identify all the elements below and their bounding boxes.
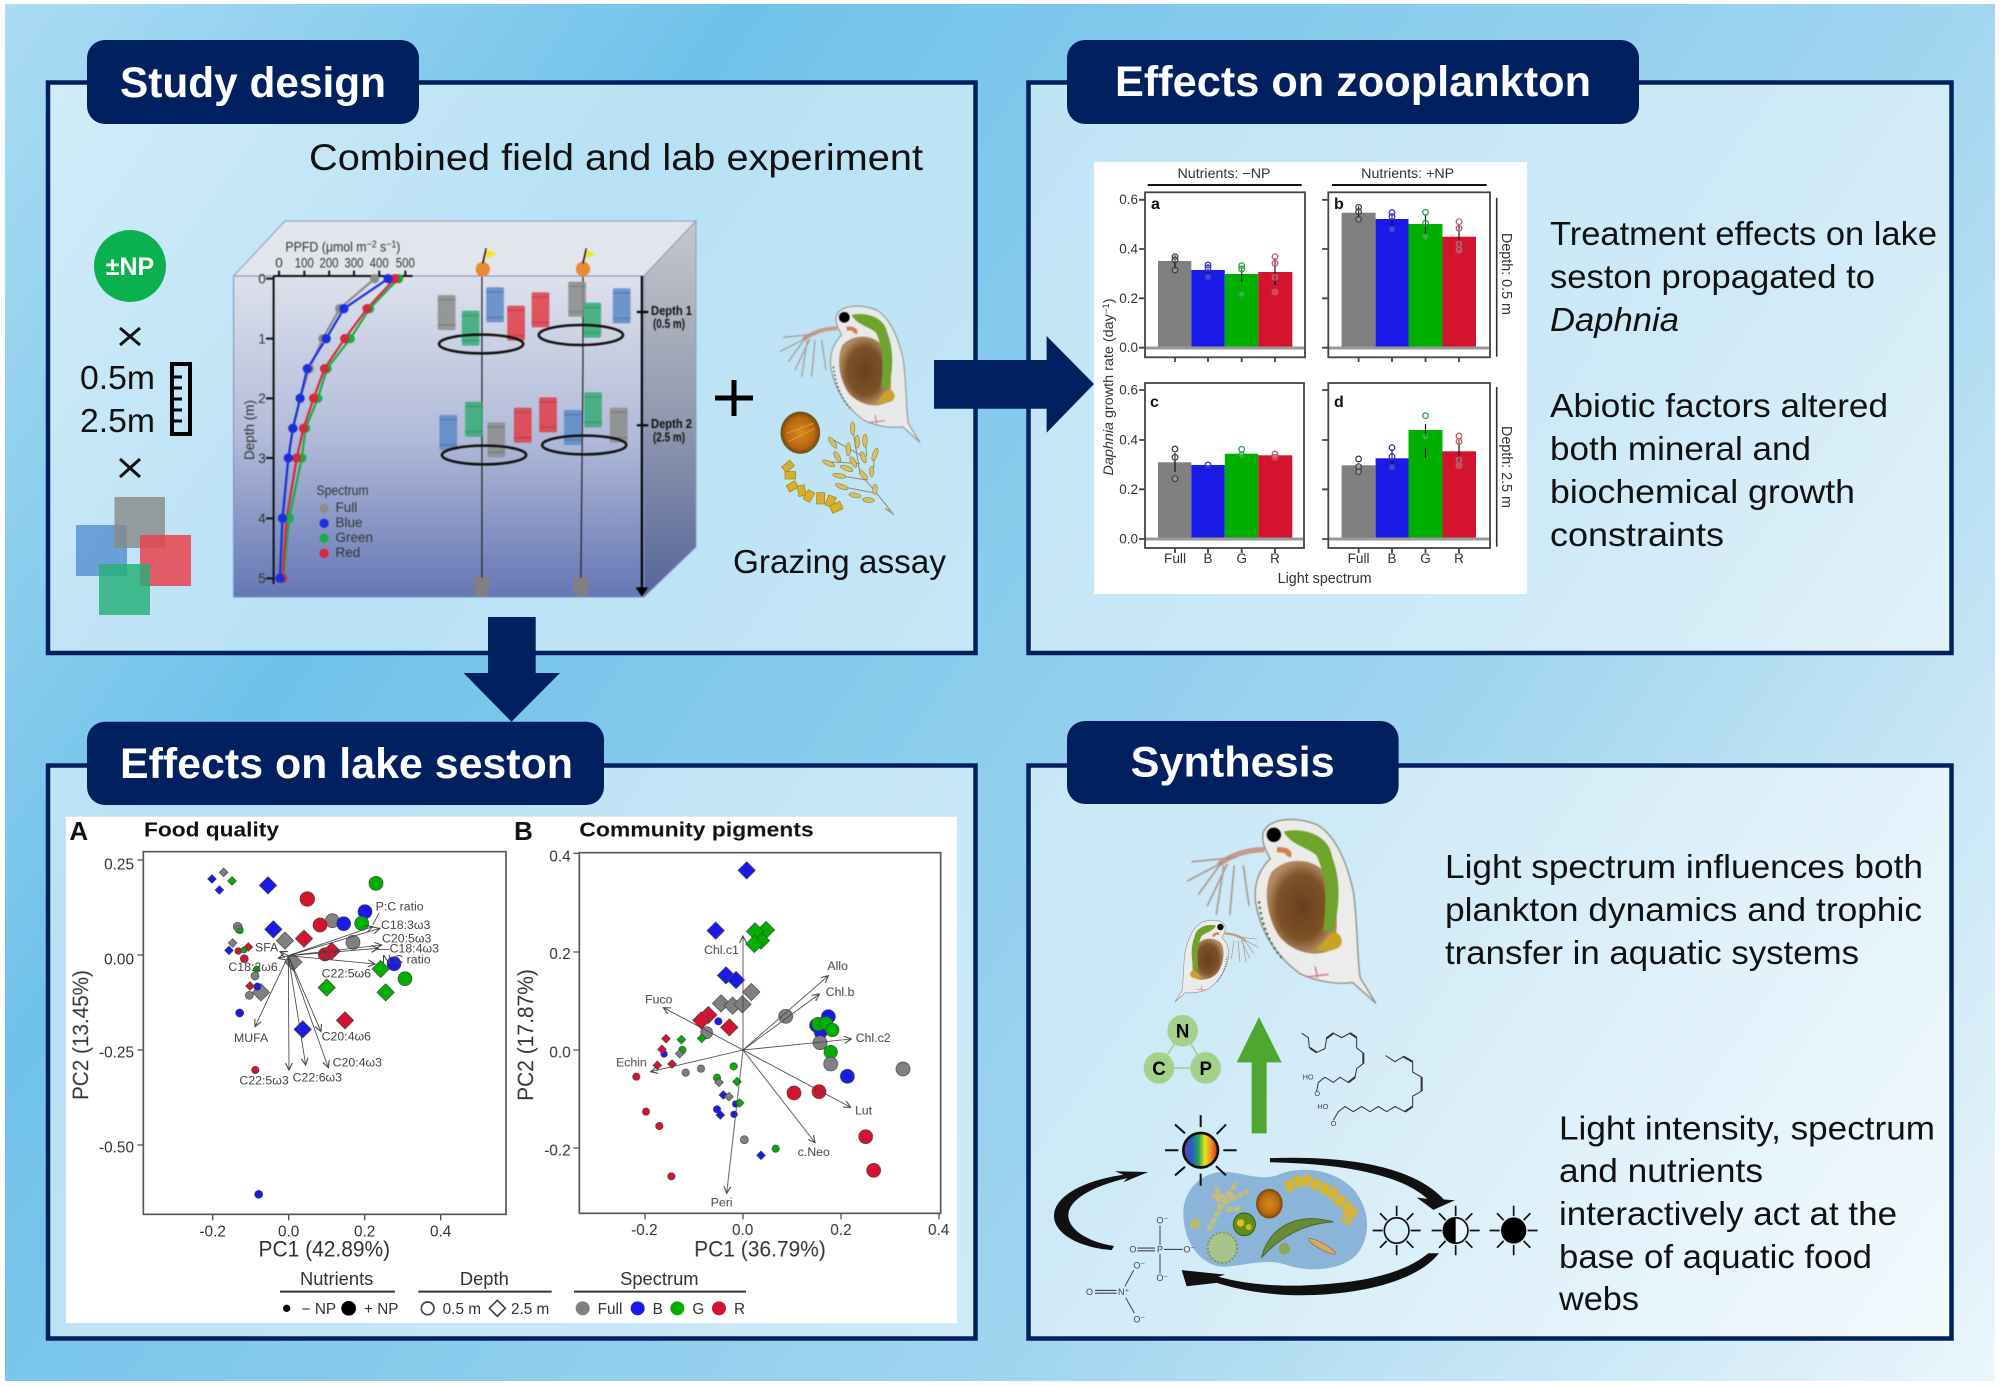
heading: synthesis bbox=[1067, 721, 1399, 804]
chart: food quality PCA bbox=[68, 816, 506, 1262]
chart: daphnia growth rate bars: a bbox=[1151, 196, 1160, 213]
labels: PCA loadings: C18:3ω3 bbox=[381, 918, 431, 932]
chart: PPFD light profile: 2 bbox=[258, 391, 266, 406]
label: depth markers: Depth 1 bbox=[651, 303, 692, 318]
text: light intensity and nutrients: and nutrients bbox=[1559, 1152, 1763, 1189]
blob: phytoplankton community bbox=[1183, 1170, 1367, 1269]
legend: nutrients depth spectrum: − NP bbox=[302, 1301, 336, 1318]
labels: PCA loadings: C20:5ω3 bbox=[382, 931, 432, 945]
labels: PCA loadings: C22:6ω3 bbox=[293, 1071, 342, 1085]
labels: PCA loadings: C22:5ω3 bbox=[239, 1073, 289, 1087]
arrows: pigment loadings bbox=[651, 936, 851, 1193]
labels: pigment loadings: Lut bbox=[855, 1103, 873, 1117]
chart: PPFD light profile: 3 bbox=[258, 451, 266, 466]
legend: nutrients depth spectrum: 0.5 m bbox=[443, 1301, 481, 1318]
chart: daphnia growth rate bars: 0.2 bbox=[1119, 482, 1138, 497]
labels: pigment loadings: Chl.b bbox=[826, 985, 855, 999]
chart: community pigments PCA: Community pigments bbox=[579, 819, 814, 842]
chart: food quality PCA: A bbox=[69, 816, 88, 846]
arrow: study design to seston bbox=[464, 617, 560, 722]
caption: grazing assay: Grazing assay bbox=[733, 543, 946, 580]
labels: pigment loadings: Chl.c2 bbox=[856, 1031, 891, 1045]
text: light spectrum influence: plankton dynamics and trophic bbox=[1445, 891, 1922, 928]
chart: PPFD light profile: 4 bbox=[258, 511, 266, 526]
depth labels bbox=[80, 359, 155, 439]
chart: PPFD light profile: 5 bbox=[258, 571, 266, 586]
points: pigment samples bbox=[633, 862, 910, 1180]
chart: food quality PCA: -0.25 bbox=[99, 1045, 134, 1062]
arrow: cycle left bbox=[1054, 1171, 1148, 1250]
bars: panel c bbox=[1158, 454, 1292, 539]
chart: food quality PCA: 0.0 bbox=[278, 1224, 299, 1241]
heading: effects on lake seston: Effects on lake seston bbox=[120, 740, 573, 788]
text: treatment effects: Treatment effects on lake bbox=[1550, 215, 1937, 252]
chart: food quality PCA: Food quality bbox=[144, 819, 280, 842]
heading: study design bbox=[87, 40, 419, 124]
chart: daphnia growth rate bars: d bbox=[1334, 394, 1344, 411]
chart: daphnia growth rate bars: −1 bbox=[1101, 303, 1111, 314]
label: depth markers: (0.5 m) bbox=[653, 316, 685, 331]
label: depth markers: (2.5 m) bbox=[653, 430, 685, 445]
chart: community pigments PCA: -0.2 bbox=[544, 1142, 571, 1159]
depth labels: 0.5m bbox=[80, 359, 155, 396]
text: abiotic factors: biochemical growth bbox=[1550, 473, 1855, 510]
legend: nutrients depth spectrum: Depth bbox=[460, 1268, 509, 1289]
labels: pigment loadings: c.Neo bbox=[798, 1145, 830, 1159]
icon: CNP stoichiometry: N bbox=[1176, 1021, 1189, 1043]
legend: spectrum: Spectrum bbox=[316, 483, 368, 498]
labels: PCA loadings: —C18:4ω3 bbox=[377, 942, 439, 956]
chart: PPFD light profile: Depth (m) bbox=[242, 400, 257, 460]
arrow: study design to zooplankton bbox=[934, 336, 1094, 433]
icon: CNP stoichiometry bbox=[1144, 1015, 1221, 1084]
chart: food quality PCA: PC1 (42.89%) bbox=[258, 1237, 390, 1262]
heading: effects on lake seston bbox=[87, 722, 604, 805]
arrow: cycle bottom bbox=[1182, 1253, 1439, 1295]
labels: PCA loadings: C20:4ω3 bbox=[333, 1056, 382, 1070]
legend: nutrients depth spectrum: G bbox=[692, 1301, 704, 1318]
text: light spectrum influence: transfer in aquatic systems bbox=[1445, 934, 1859, 971]
text: light spectrum influence bbox=[1445, 848, 1923, 971]
bars: panel d bbox=[1342, 430, 1476, 539]
icon: CNP stoichiometry: P bbox=[1199, 1059, 1212, 1080]
chart: PPFD light profile: 300 bbox=[344, 256, 364, 271]
chart: PPFD light profile: −2 bbox=[367, 240, 377, 251]
legend: nutrients depth spectrum: R bbox=[734, 1301, 745, 1318]
chart: daphnia growth rate bars: 0.4 bbox=[1119, 432, 1138, 448]
diagram: light nutrient food web cycle: O bbox=[1314, 1089, 1320, 1098]
chart: food quality PCA: 0.2 bbox=[354, 1224, 375, 1241]
text: abiotic factors: constraints bbox=[1550, 516, 1724, 553]
icon: phosphate and nitrate molecules: P bbox=[1157, 1244, 1163, 1255]
chart: daphnia growth rate bars: B bbox=[1387, 551, 1397, 566]
arrow: trophic transfer bbox=[1237, 1017, 1282, 1133]
text: abiotic factors bbox=[1550, 387, 1888, 553]
chart: PPFD light profile: 0 bbox=[258, 272, 266, 286]
icon: adult daphnia bbox=[1187, 820, 1376, 1004]
icon: depth ruler bbox=[172, 364, 190, 434]
chart: community pigments PCA: 0.2 bbox=[830, 1222, 852, 1239]
text: abiotic factors: Abiotic factors altered bbox=[1550, 387, 1888, 424]
chart: food quality PCA: -0.50 bbox=[99, 1140, 134, 1157]
heading: effects on zooplankton: Effects on zooplankton bbox=[1115, 58, 1591, 106]
diagram: incubation bottles on moorings bbox=[438, 248, 648, 597]
legend: spectrum: Red bbox=[336, 545, 360, 560]
panel: effects on lake seston bbox=[48, 722, 976, 1338]
chart: daphnia growth rate bars: ) bbox=[1101, 298, 1116, 303]
icon: phytoplankton food algae bbox=[781, 412, 894, 515]
icon: phosphate and nitrate molecules: N⁺ bbox=[1118, 1287, 1129, 1297]
labels: pigment loadings: Echin bbox=[616, 1056, 647, 1070]
chart: PPFD light profile: 500 bbox=[396, 256, 415, 271]
chart: community pigments PCA: B bbox=[514, 816, 533, 846]
chart: daphnia growth rate bars: Nutrients: +NP bbox=[1361, 166, 1454, 181]
chart: daphnia growth rate bars: 0.6 bbox=[1119, 382, 1138, 398]
chart: daphnia growth rate bars: Nutrients: −NP bbox=[1178, 166, 1270, 181]
labels: pigment loadings: Fuco bbox=[645, 992, 673, 1006]
chart: community pigments PCA bbox=[513, 816, 950, 1262]
icon: phosphate and nitrate molecules: O bbox=[1129, 1244, 1136, 1255]
legend: spectrum bbox=[316, 483, 373, 560]
legend: nutrients depth spectrum: 2.5 m bbox=[511, 1301, 549, 1318]
text: treatment effects: seston propagated to bbox=[1550, 258, 1875, 295]
icon: light intensity suns bbox=[1373, 1206, 1538, 1255]
icon: NP treatment badge: ±NP bbox=[106, 253, 154, 281]
chart: daphnia growth rate bars: 0.4 bbox=[1119, 242, 1138, 256]
legend: nutrients depth spectrum: Full bbox=[598, 1301, 622, 1318]
chart: community pigments PCA: 0.2 bbox=[549, 946, 571, 963]
labels: PCA loadings: C22:5ω6 bbox=[322, 967, 371, 981]
text: light intensity and nutrients: interactively act at the bbox=[1559, 1195, 1897, 1232]
icon: plus sign bbox=[715, 380, 753, 416]
labels: PCA loadings: C20:4ω6 bbox=[322, 1030, 371, 1044]
diagram: light nutrient food web cycle bbox=[1054, 1015, 1538, 1324]
chart: daphnia growth rate bars: Full bbox=[1348, 551, 1370, 566]
text: treatment effects: Daphnia bbox=[1550, 301, 1679, 338]
chart: PPFD light profile: 0 bbox=[275, 256, 283, 271]
chart: community pigments PCA: 0.4 bbox=[928, 1222, 950, 1239]
chart: daphnia growth rate bars: Light spectrum bbox=[1278, 571, 1372, 587]
chart: PPFD light profile: 100 bbox=[295, 256, 314, 271]
chart: daphnia growth rate bars: 0.2 bbox=[1119, 291, 1138, 306]
text: light intensity and nutrients bbox=[1558, 1110, 1935, 1317]
diagram: lake mesocosm block bbox=[234, 221, 696, 597]
chart: daphnia growth rate bars: Daphnia growth rate (day bbox=[1101, 321, 1116, 476]
icon: juvenile daphnia bbox=[1175, 920, 1259, 1002]
bars: panel b bbox=[1342, 213, 1476, 348]
icon: phosphate and nitrate molecules: O⁻ bbox=[1183, 1244, 1195, 1255]
labels: pigment loadings: Chl.c1 bbox=[704, 943, 739, 957]
chart: daphnia growth rate bars: B bbox=[1203, 551, 1213, 566]
icon: CNP stoichiometry: C bbox=[1152, 1059, 1166, 1080]
chart: food quality PCA: PC2 (13.45%) bbox=[68, 970, 93, 1100]
icon: multiply sign bbox=[120, 459, 140, 477]
chart: daphnia growth rate bars bbox=[1094, 162, 1527, 594]
chart: PPFD light profile: s bbox=[377, 239, 386, 255]
labels: PCA loadings: N:C ratio bbox=[382, 952, 431, 966]
chart: daphnia growth rate bars: G bbox=[1420, 551, 1431, 566]
icon: overlapping spectrum squares bbox=[76, 497, 191, 615]
diagram: light nutrient food web cycle: HO bbox=[1303, 1073, 1314, 1082]
icon: phosphate and nitrate molecules: O⁻ bbox=[1156, 1215, 1168, 1226]
text: light intensity and nutrients: base of aquatic food bbox=[1559, 1238, 1872, 1275]
panel: synthesis bbox=[1028, 721, 1952, 1338]
text: light intensity and nutrients: webs bbox=[1558, 1280, 1639, 1317]
legend: nutrients depth spectrum: + NP bbox=[364, 1301, 399, 1318]
points: seston samples bbox=[208, 868, 412, 1198]
heading: effects on zooplankton bbox=[1067, 40, 1639, 124]
chart: community pigments PCA: 0.0 bbox=[549, 1044, 571, 1061]
label: depth markers: Depth 2 bbox=[651, 416, 692, 431]
chart: daphnia growth rate bars: Depth: 2.5 m bbox=[1498, 426, 1515, 508]
chart: daphnia growth rate bars: Full bbox=[1164, 551, 1186, 566]
legend: spectrum: Blue bbox=[336, 515, 363, 530]
chart: PPFD light profile bbox=[242, 239, 415, 586]
chart: community pigments PCA: 0.4 bbox=[549, 849, 571, 866]
panel: effects on zooplankton bbox=[1028, 40, 1952, 653]
chart: daphnia growth rate bars: 0.6 bbox=[1119, 192, 1138, 207]
icon: rainbow sun bbox=[1165, 1115, 1237, 1186]
icon: phosphate and nitrate molecules: O⁻ bbox=[1133, 1314, 1145, 1324]
icon: daphnia bbox=[780, 306, 920, 442]
labels: PCA loadings: C18:2ω6 bbox=[228, 960, 278, 974]
icon: fatty acid molecules bbox=[1302, 1033, 1422, 1120]
legend: nutrients depth spectrum: Spectrum bbox=[620, 1268, 699, 1289]
figure: PCA white background bbox=[66, 817, 957, 1323]
chart: PPFD light profile: −1 bbox=[386, 240, 397, 251]
diagram: light nutrient food web cycle: O bbox=[1331, 1119, 1337, 1128]
icon: phosphate and nitrate molecules: O bbox=[1086, 1287, 1093, 1297]
subtitle: combined experiment: Combined field and lab experiment bbox=[309, 137, 924, 178]
chart: food quality PCA: 0.4 bbox=[430, 1224, 452, 1241]
text: abiotic factors: both mineral and bbox=[1550, 430, 1811, 467]
chart: food quality PCA: 0.00 bbox=[104, 951, 134, 968]
chart: PPFD light profile: ) bbox=[396, 239, 400, 255]
heading: synthesis: Synthesis bbox=[1131, 739, 1335, 787]
arrows: PCA loadings bbox=[255, 913, 382, 1070]
label: depth markers bbox=[651, 303, 692, 445]
panel: study design bbox=[48, 40, 976, 653]
chart: PPFD light profile: 1 bbox=[258, 332, 266, 346]
chart: community pigments PCA: -0.2 bbox=[631, 1222, 658, 1239]
chart: daphnia growth rate bars: c bbox=[1150, 394, 1159, 411]
legend: nutrients depth spectrum: B bbox=[653, 1301, 663, 1318]
text: treatment effects bbox=[1550, 215, 1937, 338]
chart: food quality PCA: -0.2 bbox=[199, 1224, 226, 1241]
chart: daphnia growth rate bars: R bbox=[1270, 551, 1280, 566]
bars: panel a bbox=[1158, 261, 1292, 348]
heading: study design: Study design bbox=[120, 59, 386, 107]
chart: daphnia growth rate bars: 0.0 bbox=[1119, 532, 1138, 546]
icon: multiply sign bbox=[120, 328, 140, 345]
text: light spectrum influence: Light spectrum influences both bbox=[1445, 848, 1923, 885]
chart: community pigments PCA: PC1 (36.79%) bbox=[694, 1237, 826, 1262]
chart: daphnia growth rate bars: Depth: 0.5 m bbox=[1498, 233, 1515, 315]
chart: PPFD light profile: 200 bbox=[320, 256, 338, 271]
arrow: cycle top bbox=[1270, 1158, 1455, 1210]
icon: phosphate and nitrate molecules: O⁻ bbox=[1133, 1260, 1145, 1270]
icon: NP treatment badge bbox=[94, 230, 166, 302]
chart: community pigments PCA: 0.0 bbox=[732, 1222, 753, 1239]
depth labels: 2.5m bbox=[80, 402, 155, 439]
text: light intensity and nutrients: Light intensity, spectrum bbox=[1559, 1110, 1935, 1146]
legend: spectrum: Full bbox=[336, 500, 357, 515]
labels: pigment loadings: Allo bbox=[827, 959, 848, 973]
labels: PCA loadings: SFA bbox=[255, 940, 279, 954]
chart: daphnia growth rate bars: 0.0 bbox=[1119, 340, 1138, 355]
chart: community pigments PCA: PC2 (17.87%) bbox=[513, 969, 538, 1101]
diagram: light nutrient food web cycle: HO bbox=[1317, 1102, 1329, 1111]
legend: nutrients depth spectrum bbox=[280, 1268, 746, 1318]
icon: phosphate and nitrate molecules: O⁻ bbox=[1156, 1273, 1168, 1283]
chart: daphnia growth rate bars: b bbox=[1334, 196, 1344, 213]
legend: nutrients depth spectrum: Nutrients bbox=[300, 1268, 373, 1289]
labels: pigment loadings: Peri bbox=[711, 1196, 733, 1210]
legend: spectrum: Green bbox=[336, 530, 373, 545]
chart: food quality PCA: 0.25 bbox=[104, 856, 134, 873]
labels: pigment loadings bbox=[616, 943, 891, 1210]
icon: phosphate and nitrate molecules bbox=[1086, 1215, 1195, 1324]
chart: daphnia growth rate bars: R bbox=[1454, 551, 1464, 566]
labels: PCA loadings: P:C ratio bbox=[376, 900, 424, 914]
chart: PPFD light profile: 400 bbox=[370, 256, 389, 271]
chart: PPFD light profile: PPFD (μmol m bbox=[285, 239, 377, 255]
chart: daphnia growth rate bars: G bbox=[1236, 551, 1247, 566]
labels: PCA loadings: MUFA bbox=[234, 1031, 269, 1045]
labels: PCA loadings bbox=[228, 900, 439, 1087]
